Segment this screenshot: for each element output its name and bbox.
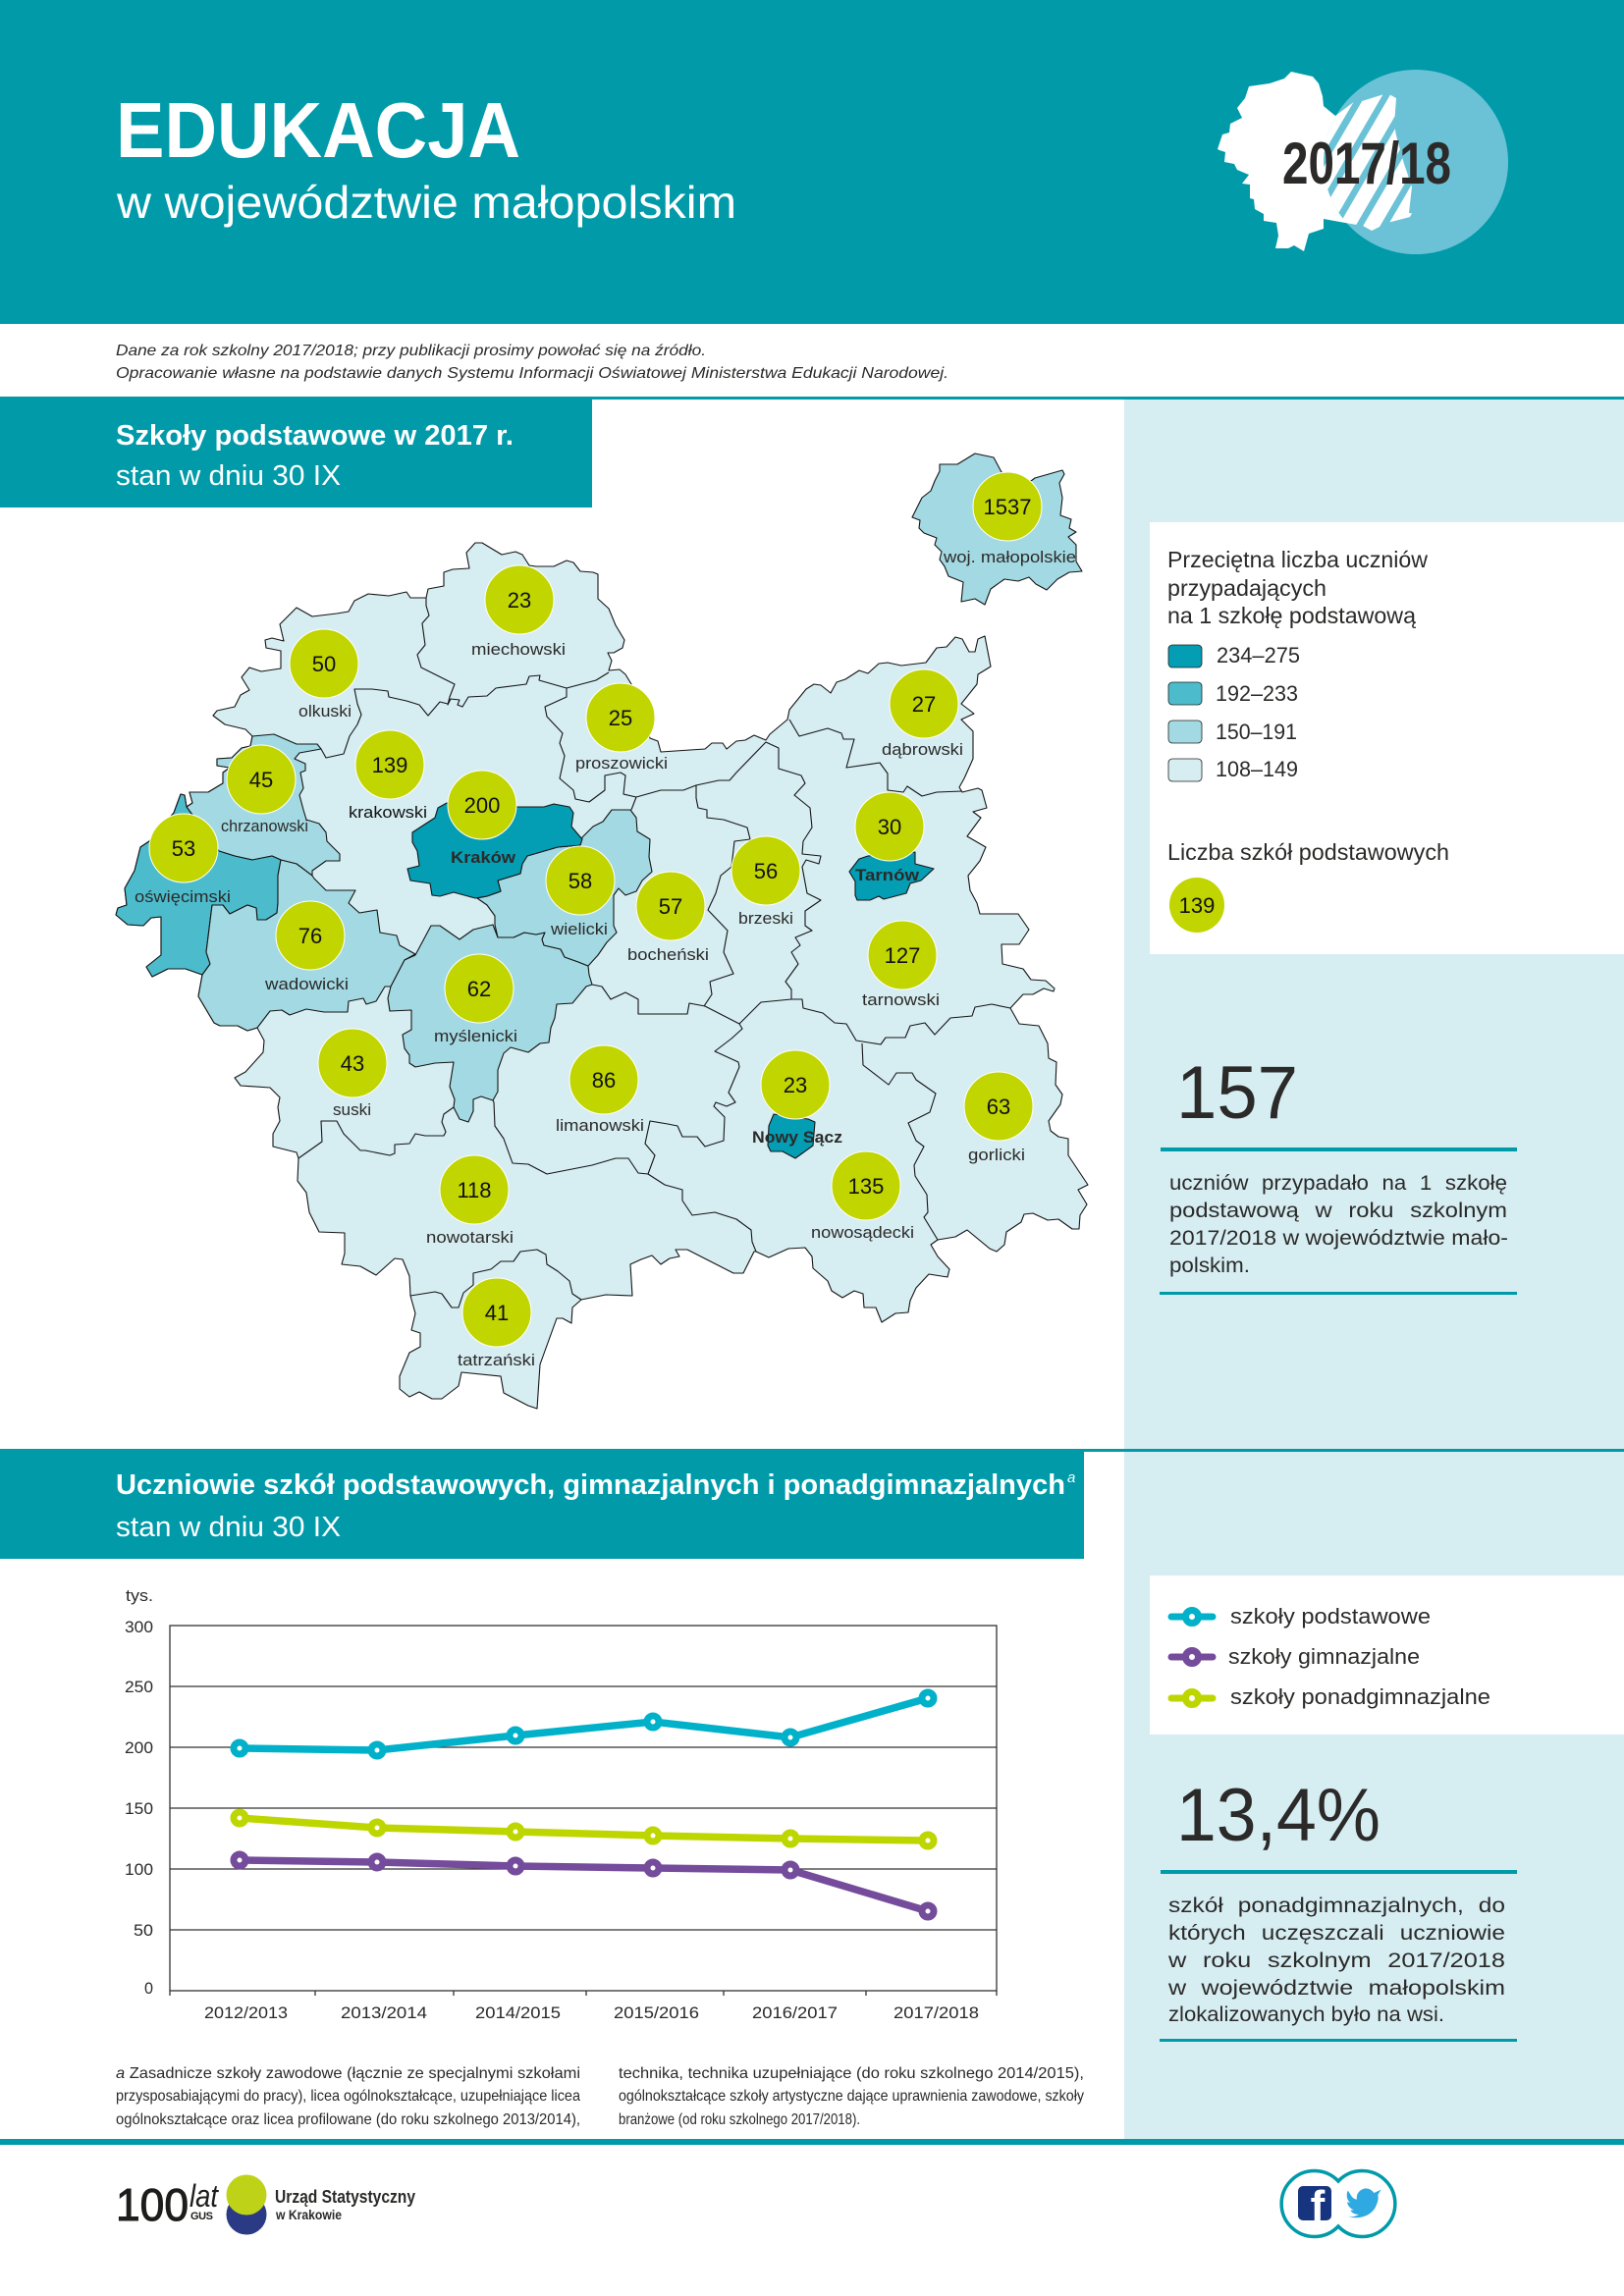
county: krakowski	[349, 730, 427, 822]
county: limanowski: 86	[592, 1068, 616, 1093]
logo: Urząd Statystyczny w Krakowie: Urząd Statystyczny	[275, 2187, 415, 2207]
legend swatch 108–149	[1168, 757, 1298, 781]
legend circle sample: 139	[1179, 893, 1215, 918]
icon: twitter	[1346, 2188, 1381, 2217]
county: miechowski	[471, 565, 566, 659]
heading: primary schools: Szkoły podstawowe w 2017 r.	[116, 420, 514, 452]
year badge with region silhouette	[1218, 70, 1508, 254]
logo: Urząd Statystyczny w Krakowie	[226, 2175, 415, 2234]
chart axis labels: 250	[125, 1678, 153, 1696]
source note: Dane za rok szkolny 2017/2018; przy publikacji prosimy powołać się na źródło.	[116, 343, 706, 359]
city: Tarnów	[849, 852, 934, 900]
right side panel	[1124, 400, 1624, 2139]
county: wadowicki	[198, 860, 415, 1031]
inset: whole voivodeship: 1537	[984, 495, 1031, 519]
chart axis labels: 2017/2018	[893, 2003, 979, 2022]
city: Nowy Sącz value: 23	[784, 1073, 807, 1097]
county: limanowski: limanowski	[556, 1116, 644, 1135]
city: Nowy Sącz value	[752, 1050, 842, 1147]
footnote: branżowe (od roku szkolnego 2017/2018).	[619, 2111, 860, 2128]
statistic: 13,4%: 13,4%	[1176, 1774, 1380, 1857]
footnote: ogólnokształcące szkoły artystyczne dające uprawnienia zawodowe, szkoły	[619, 2088, 1084, 2105]
county: wadowicki value: 76	[298, 924, 322, 948]
county: tatrzański	[458, 1278, 535, 1369]
city: Kraków value: 200	[464, 793, 500, 818]
statistic: 157: 157	[1176, 1051, 1298, 1135]
chart axis labels: 2013/2014	[341, 2003, 427, 2022]
statistic: 13,4%	[1160, 1774, 1517, 2042]
chart axis labels: 0	[144, 1979, 153, 1998]
inset: whole voivodeship	[912, 454, 1082, 605]
county: suski	[318, 1029, 387, 1119]
heading: pupils: stan w dniu 30 IX	[116, 1512, 341, 1543]
county: krakowski: krakowski	[349, 803, 427, 822]
heading: primary schools	[0, 400, 592, 507]
county: suski: 43	[341, 1051, 364, 1076]
city: Tarnów value	[855, 792, 924, 884]
chart axis labels: 100	[125, 1860, 153, 1879]
legend: szkoły ponadgimnazjalne: szkoły ponadgimnazjalne	[1230, 1684, 1490, 1709]
footnote	[116, 2065, 1084, 2128]
heading: pupils: a	[1067, 1469, 1075, 1486]
county: wielicki	[477, 810, 652, 966]
subtitle: w województwie małopolskim	[116, 177, 736, 228]
chart axis labels	[125, 1586, 979, 2022]
county: bocheński: bocheński	[627, 945, 709, 964]
county: nowosądecki: nowosądecki	[811, 1223, 914, 1242]
county: tarnowski	[862, 921, 940, 1009]
statistic: 13,4%: szkół ponadgimnazjalnych, do	[1168, 1895, 1505, 1917]
county: bocheński	[627, 872, 709, 964]
county: tatrzański: 41	[485, 1301, 509, 1325]
legend swatch 150–191	[1168, 720, 1297, 744]
county: chrzanowski value	[221, 745, 308, 835]
legend swatch 234–275	[1168, 643, 1300, 667]
statistic: 157: polskim.	[1169, 1255, 1250, 1277]
county: wadowicki value	[264, 901, 349, 993]
county: nowotarski	[426, 1155, 514, 1247]
map legend	[1150, 522, 1624, 954]
county: brzeski: 56	[754, 859, 778, 883]
county: tatrzański: tatrzański	[458, 1351, 535, 1369]
chart axis labels: 2015/2016	[614, 2003, 699, 2022]
legend swatch 234–275: 234–275	[1217, 643, 1300, 667]
chart axis labels: 150	[125, 1799, 153, 1818]
county: wadowicki value: wadowicki	[264, 975, 349, 993]
source note	[116, 343, 948, 382]
county: myślenicki	[388, 925, 592, 1122]
choropleth map of Małopolska counties	[116, 543, 1088, 1409]
county: oświęcimski value: 53	[172, 836, 195, 861]
chart axis labels: 2014/2015	[475, 2003, 561, 2022]
county: dąbrowski: 27	[912, 692, 936, 717]
footnote: a Zasadnicze szkoły zawodowe (łącznie ze specjalnymi szkołami	[116, 2065, 580, 2082]
series: szkoły ponadgimnazjalne	[234, 1812, 934, 1846]
title: EDUKACJA	[116, 86, 520, 174]
county: gorlicki: 63	[987, 1095, 1010, 1119]
series: szkoły podstawowe	[234, 1692, 934, 1756]
county: olkuski: olkuski	[298, 702, 352, 721]
county: oświęcimski value: oświęcimski	[135, 887, 231, 906]
county: nowotarski: nowotarski	[426, 1228, 514, 1247]
city: Kraków value: Kraków	[451, 848, 516, 867]
map legend: przypadających	[1167, 575, 1326, 601]
county: gorlicki: gorlicki	[968, 1146, 1025, 1164]
footnote: przysposabiającymi do pracy), licea ogólnokształcące, uzupełniające licea	[116, 2088, 580, 2105]
header band	[0, 0, 1624, 324]
county: wielicki value: 58	[568, 869, 592, 893]
legend swatch 192–233	[1168, 681, 1298, 706]
county: gorlicki	[964, 1072, 1033, 1164]
legend swatch 108–149: 108–149	[1216, 757, 1298, 781]
legend circle sample	[1169, 878, 1224, 933]
county: tarnowski: 127	[885, 943, 920, 968]
city: Nowy Sącz	[768, 1114, 815, 1158]
county: proszowicki: proszowicki	[575, 754, 668, 773]
county: dąbrowski: dąbrowski	[882, 740, 963, 759]
logo: 100 lat GUS: GUS	[190, 2211, 213, 2222]
statistic: 13,4%: zlokalizowanych było na wsi.	[1168, 2003, 1444, 2026]
county: olkuski	[290, 629, 358, 721]
county: nowosądecki: 135	[848, 1174, 884, 1199]
heading: primary schools: stan w dniu 30 IX	[116, 460, 341, 492]
legend swatch 192–233: 192–233	[1216, 681, 1298, 706]
series: szkoły gimnazjalne	[234, 1854, 934, 1917]
county: proszowicki	[575, 683, 668, 773]
year badge with region silhouette: 2017/18	[1282, 131, 1451, 196]
icon: facebook: f	[1311, 2182, 1326, 2230]
county: krakowski: 139	[372, 753, 407, 777]
county: suski: suski	[333, 1100, 371, 1119]
chart axis labels: 2016/2017	[752, 2003, 838, 2022]
footnote: ogólnokształcące oraz licea profilowane (do roku szkolnego 2013/2014),	[116, 2111, 580, 2128]
county: wielicki value	[546, 846, 615, 938]
county: nowosądecki	[811, 1151, 914, 1242]
map legend: Liczba szkół podstawowych	[1167, 839, 1449, 865]
social icons	[1281, 2170, 1395, 2236]
county: limanowski	[556, 1045, 644, 1135]
chart axis labels: 2012/2013	[204, 2003, 288, 2022]
heading: pupils: Uczniowie szkół podstawowych, gimnazjalnych i ponadgimnazjalnych	[116, 1469, 1065, 1501]
map legend: na 1 szkołę podstawową	[1167, 603, 1416, 628]
county: tarnowski: tarnowski	[862, 990, 940, 1009]
county: oświęcimski value	[135, 814, 231, 906]
chart axis labels: 300	[125, 1618, 153, 1636]
city: Tarnów value: 30	[878, 815, 901, 839]
statistic: 13,4%: w województwie małopolskim	[1167, 1977, 1505, 2000]
city: Kraków	[407, 803, 582, 898]
statistic: 157	[1160, 1051, 1517, 1295]
county: chrzanowski value: chrzanowski	[221, 817, 308, 835]
county: brzeski	[731, 836, 800, 928]
county: miechowski: 23	[508, 588, 531, 613]
source note: Opracowanie własne na podstawie danych Systemu Informacji Oświatowej Ministerstwa Edukacji Narodowej.	[116, 365, 948, 382]
county: dąbrowski	[882, 669, 963, 759]
footnote: technika, technika uzupełniające (do roku szkolnego 2014/2015),	[619, 2065, 1084, 2082]
map legend: Przeciętna liczba uczniów	[1167, 547, 1428, 572]
city: Nowy Sącz value: Nowy Sącz	[752, 1128, 842, 1147]
city: Kraków value	[448, 771, 516, 867]
heading: pupils	[0, 1452, 1084, 1559]
statistic: 13,4%: w roku szkolnym 2017/2018	[1167, 1949, 1505, 1972]
county: myślenicki value: myślenicki	[434, 1027, 517, 1045]
county: myślenicki value: 62	[467, 977, 491, 1001]
legend swatch 150–191: 150–191	[1216, 720, 1297, 744]
logo: 100 lat GUS: 100	[116, 2179, 189, 2230]
line chart	[125, 1586, 997, 2022]
county: proszowicki: 25	[609, 706, 632, 730]
legend: szkoły podstawowe: szkoły podstawowe	[1230, 1604, 1431, 1629]
county borders	[298, 598, 1010, 1308]
legend: szkoły gimnazjalne: szkoły gimnazjalne	[1228, 1644, 1420, 1669]
county: oświęcimski	[116, 794, 281, 977]
county: brzeski: brzeski	[738, 909, 793, 928]
chart axis labels: 200	[125, 1738, 153, 1757]
county: olkuski: 50	[312, 652, 336, 676]
county: bocheński: 57	[659, 894, 682, 919]
county: chrzanowski	[187, 734, 340, 876]
county: wielicki value: wielicki	[550, 920, 608, 938]
county: nowotarski: 118	[457, 1178, 492, 1202]
inset: whole voivodeship: woj. małopolskie	[943, 548, 1076, 566]
bottom rule	[0, 2139, 1624, 2145]
chart legend	[1150, 1575, 1624, 1735]
city: Tarnów value: Tarnów	[855, 866, 920, 884]
statistic: 157: podstawową w roku szkolnym	[1169, 1200, 1507, 1222]
logo: Urząd Statystyczny w Krakowie: w Krakowie	[275, 2207, 342, 2222]
county: myślenicki value	[434, 954, 517, 1045]
chart axis labels: tys.	[126, 1586, 153, 1605]
chart axis labels: 50	[134, 1921, 153, 1940]
county: chrzanowski value: 45	[249, 768, 273, 792]
statistic: 157: uczniów przypadało na 1 szkołę	[1169, 1172, 1507, 1195]
logo: 100 lat GUS: lat	[189, 2178, 219, 2214]
county: miechowski: miechowski	[471, 640, 566, 659]
statistic: 13,4%: których uczęszczali uczniowie	[1168, 1922, 1505, 1945]
statistic: 157: 2017/2018 w województwie mało-	[1169, 1227, 1508, 1250]
